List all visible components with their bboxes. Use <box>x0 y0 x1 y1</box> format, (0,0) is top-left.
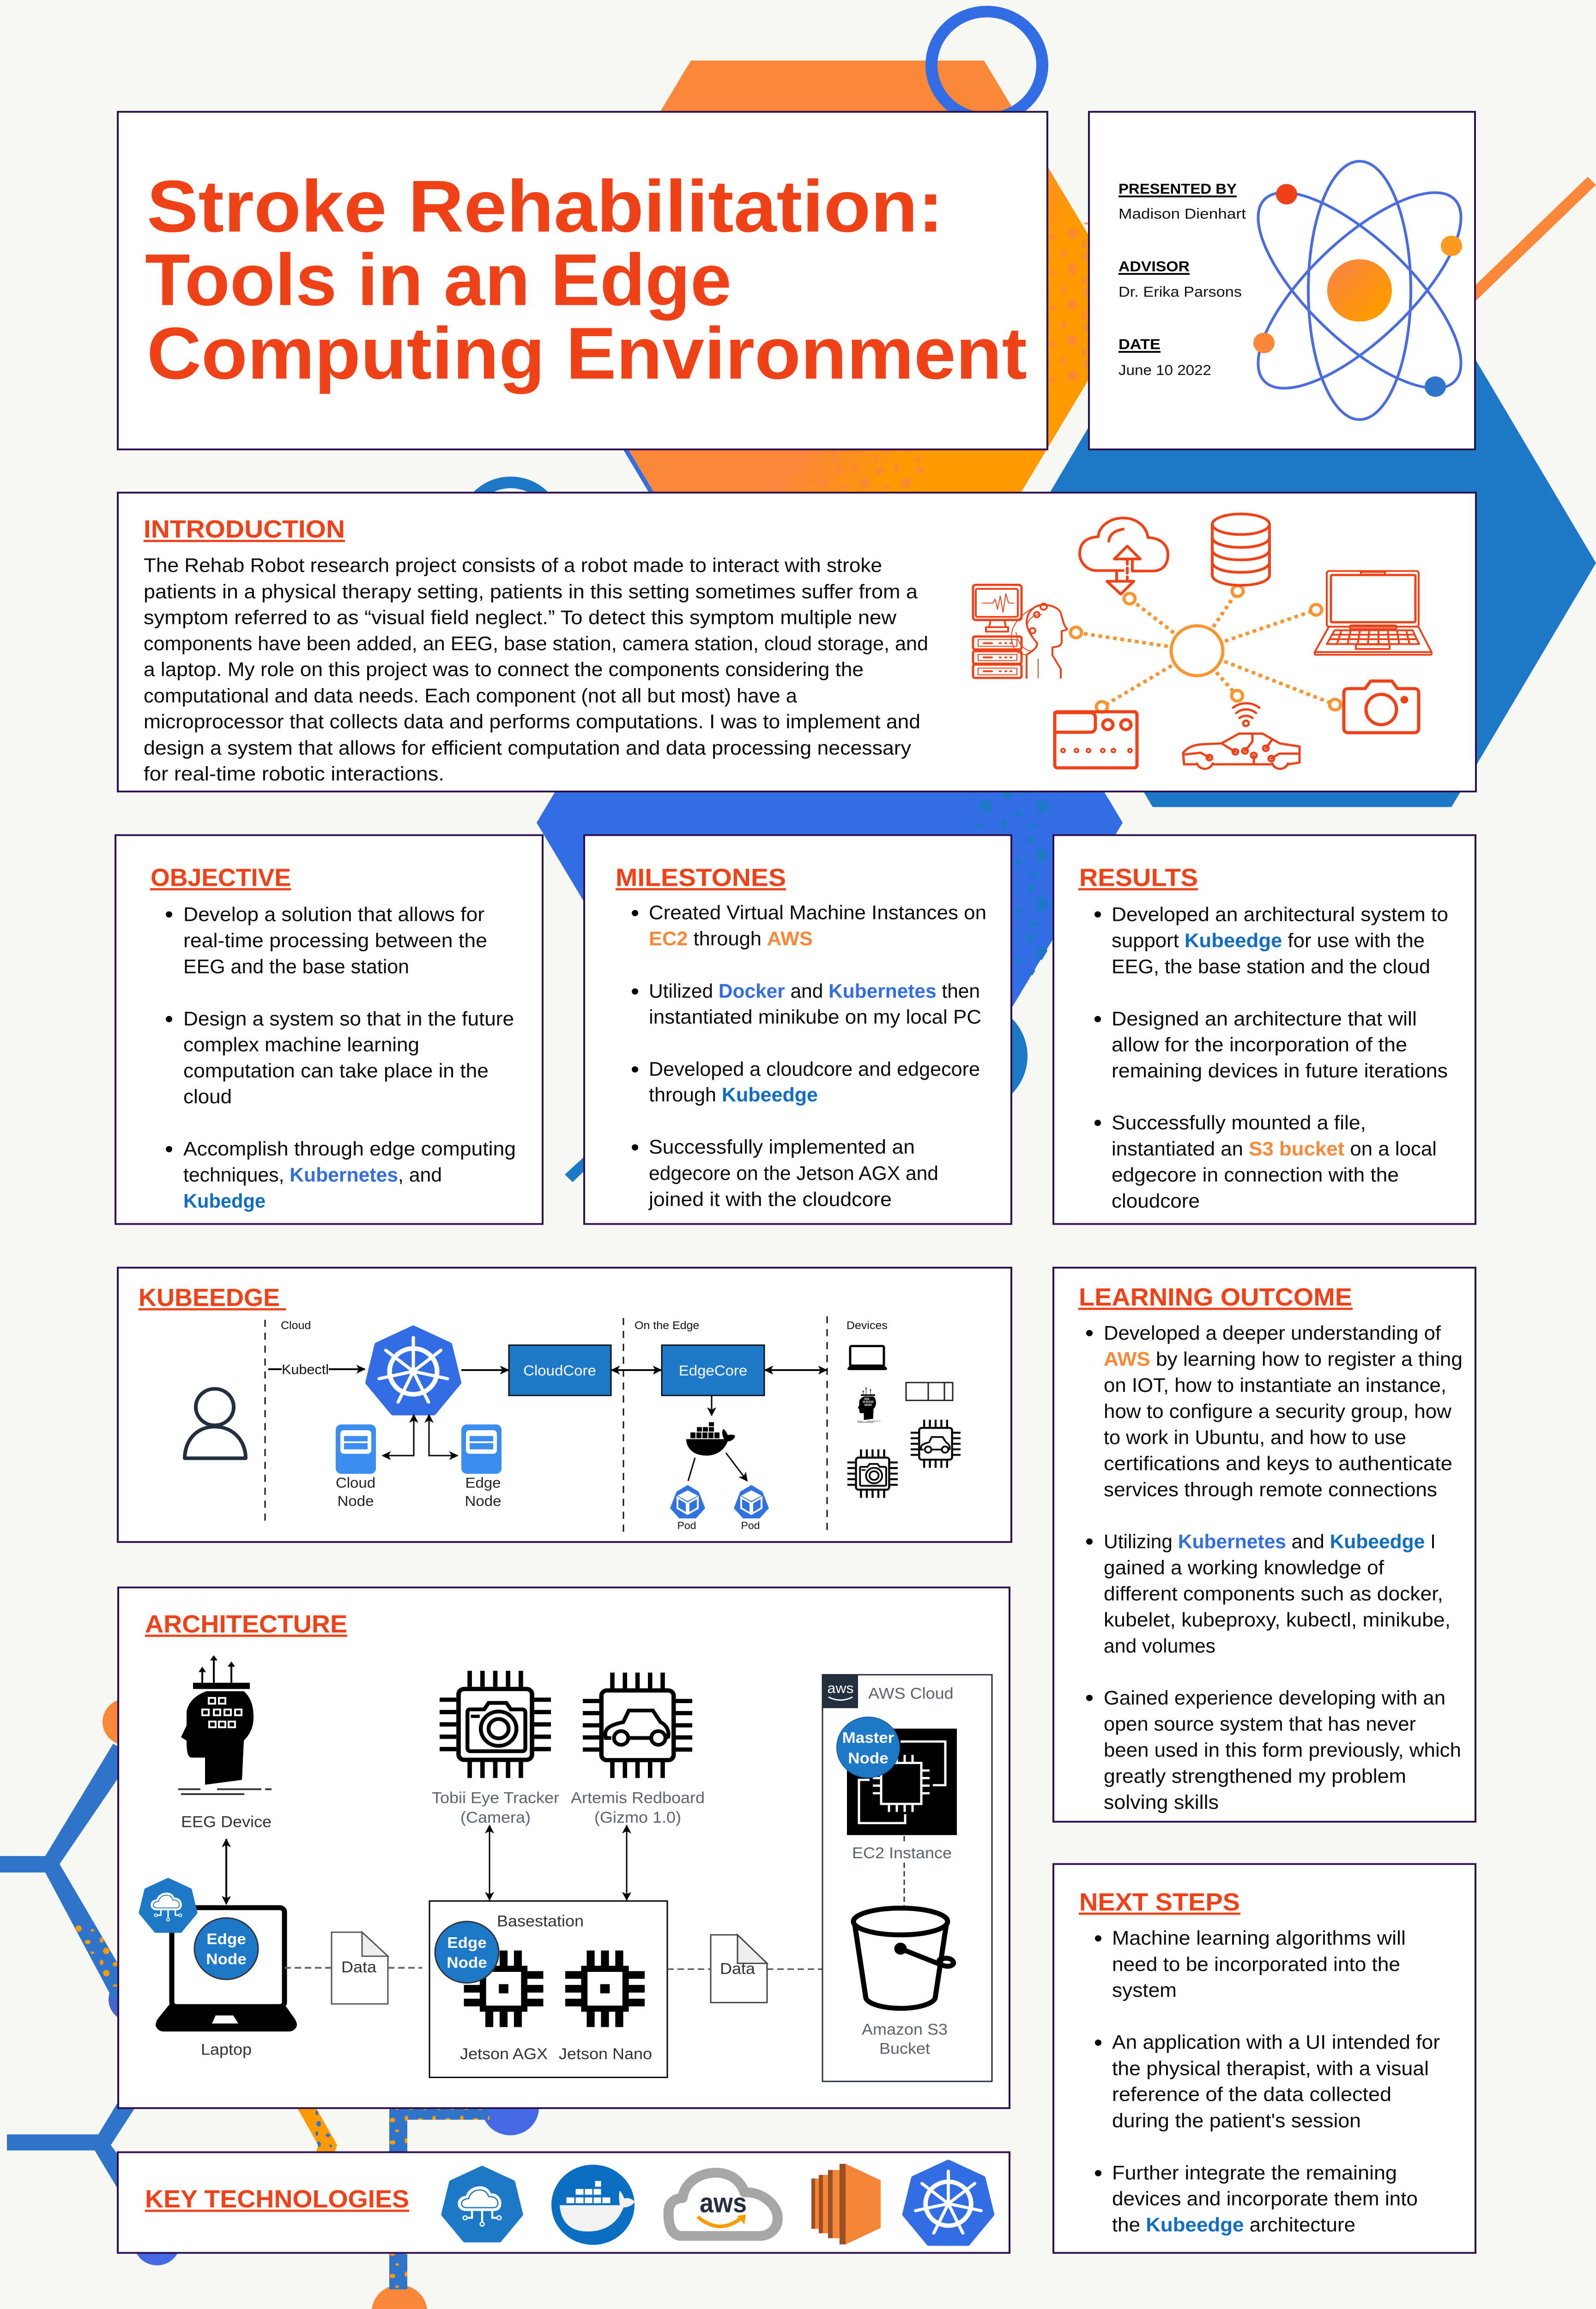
badge: laptop edge node <box>194 1918 258 1979</box>
icon: jetson nano <box>559 1951 652 2063</box>
icon: artemis redboard: (Gizmo 1.0) <box>594 1808 681 1826</box>
bullet list: learning outcome: AWS by learning how to register a thing <box>1104 1348 1463 1370</box>
icon: edge node: Node <box>465 1493 501 1509</box>
bullet list: learning outcome: gained a working knowledge of <box>1104 1557 1384 1579</box>
label: s3 bucket <box>862 2020 948 2057</box>
arrow: cloudcore to edgecore <box>611 1369 661 1371</box>
advisor: ADVISOR <box>1118 258 1190 274</box>
bullet list: results: EEG, the base station and the cloud <box>1112 956 1430 978</box>
panel: next steps <box>1053 1864 1475 2253</box>
icon: aws cloud: aws <box>700 2188 747 2218</box>
icon: jetson nano: Jetson Nano <box>559 2045 652 2063</box>
icon: connected car <box>1183 703 1300 769</box>
bullet list: learning outcome: greatly strengthened my problem <box>1104 1765 1406 1787</box>
text: introduction body: The Rehab Robot research project consists of a robot made to interact with stroke <box>144 555 882 576</box>
icon: pod 1: Pod <box>677 1520 696 1531</box>
box: basestation <box>429 1901 667 2077</box>
bullet list: learning outcome: and volumes <box>1104 1635 1215 1657</box>
aws badge <box>822 1675 858 1708</box>
label: s3 bucket: Bucket <box>879 2040 930 2057</box>
badge: laptop edge node: Edge <box>206 1931 246 1948</box>
icon: control module <box>1055 712 1137 768</box>
bullet list: next steps <box>1095 1928 1440 2236</box>
badge: master node: Master <box>842 1729 894 1747</box>
icon: cloud node: Node <box>338 1493 374 1509</box>
heading: architecture: ARCHITECTURE <box>145 1610 347 1638</box>
bullet list: objective: Design a system so that in the future <box>183 1008 514 1030</box>
icon: artemis redboard <box>571 1673 705 1826</box>
bullet list: next steps: Further integrate the remaining <box>1112 2162 1397 2184</box>
bullet list: milestones: through Kubeedge <box>649 1084 818 1106</box>
icon: data file 2 <box>711 1935 767 2002</box>
badge: laptop edge node: Node <box>206 1951 247 1968</box>
bullet list: learning outcome: Developed a deeper understanding of <box>1104 1323 1441 1344</box>
bullet list: objective: EEG and the base station <box>183 956 409 978</box>
presented by <box>1118 181 1246 222</box>
text: introduction body: for real-time robotic interactions. <box>144 763 444 785</box>
bullet list: learning outcome: been used in this form previously, which <box>1104 1740 1461 1761</box>
icon: ec2 instance: EC2 Instance <box>852 1844 952 1862</box>
bullet list: learning outcome: services through remote connections <box>1104 1479 1437 1501</box>
badge: basestation edge node: Node <box>447 1954 487 1971</box>
icon: kubernetes <box>369 1329 458 1412</box>
arrow: artemis to basestation <box>626 1825 627 1900</box>
bullet list: results: Developed an architectural system to <box>1112 904 1448 925</box>
text: introduction body <box>144 555 928 785</box>
text: introduction body: computational and data needs. Each component (not all but most) have a <box>144 685 798 707</box>
bullet list: results <box>1094 904 1448 1212</box>
bullet list: milestones: instantiated minikube on my local PC <box>649 1006 981 1028</box>
bullet list: results: Successfully mounted a file, <box>1112 1112 1366 1134</box>
bullet list: milestones <box>632 902 986 1210</box>
zone dividers and labels <box>265 1316 888 1535</box>
bullet list: learning outcome: open source system that has never <box>1104 1713 1416 1735</box>
bullet list: results: remaining devices in future iterations <box>1112 1060 1448 1082</box>
icon: aws cloud <box>669 2173 778 2236</box>
arrows: kubernetes to nodes <box>382 1414 458 1456</box>
bullet list: objective: computation can take place in the <box>183 1060 489 1082</box>
icon: artemis redboard: Artemis Redboard <box>571 1789 705 1807</box>
text: introduction body: components have been added, an EEG, base station, camera station, cloud storage, and <box>144 633 928 655</box>
box: basestation: Basestation <box>497 1912 584 1930</box>
presented by: PRESENTED BY <box>1118 181 1237 197</box>
bullet list: milestones: Developed a cloudcore and edgecore <box>649 1058 980 1080</box>
text: introduction body: a laptop. My role on this project was to connect the components considering the <box>144 659 864 681</box>
bullet list: objective: Accomplish through edge computing <box>183 1138 516 1160</box>
bullet list: learning outcome: how to configure a security group, how <box>1104 1401 1452 1422</box>
bullet list: objective: techniques, Kubernetes, and <box>183 1164 442 1186</box>
icon: cloud node: Cloud <box>336 1475 375 1491</box>
arrow: edgecore to devices <box>765 1369 827 1371</box>
bullet list: learning outcome: to work in Ubuntu, and how to use <box>1104 1427 1406 1449</box>
icon: jetson agx: Jetson AGX <box>460 2045 548 2063</box>
badge: master node <box>837 1717 900 1777</box>
heading: key technologies: KEY TECHNOLOGIES <box>145 2185 409 2213</box>
arrow: kubernetes to cloudcore <box>461 1369 508 1371</box>
heading: title: Computing Environment <box>147 312 1027 394</box>
date: June 10 2022 <box>1118 362 1211 378</box>
heading: title: Tools in an Edge <box>145 239 732 321</box>
panel: introduction <box>118 493 1476 792</box>
icon: camera <box>1344 681 1419 733</box>
bullet list: milestones: Successfully implemented an <box>649 1136 915 1158</box>
panel: key technologies <box>118 2152 1010 2253</box>
date: DATE <box>1118 336 1161 352</box>
text: introduction body: microprocessor that collects data and performs computations. I was to implement and <box>144 711 920 733</box>
heading: title <box>145 165 1027 394</box>
icon: device camera chip <box>847 1450 898 1498</box>
icon: edge node: Edge <box>465 1475 501 1491</box>
bullet list: next steps: need to be incorporated into the <box>1112 1954 1400 1976</box>
icon: cloud node <box>336 1424 376 1509</box>
icon: user <box>185 1389 246 1458</box>
panel: architecture <box>118 1588 1010 2108</box>
bullet list: next steps: reference of the data collected <box>1112 2084 1391 2105</box>
icon: laptop <box>1315 571 1432 655</box>
badge: basestation edge node <box>435 1922 499 1983</box>
connector: ec2 to s3 <box>903 1836 905 1906</box>
bullet list: results: edgecore in connection with the <box>1112 1164 1399 1186</box>
bullet list: results: cloudcore <box>1112 1190 1200 1212</box>
icon: kubeedge badge <box>141 1880 195 1931</box>
text: introduction body: design a system that allows for efficient computation and data processing necessary <box>144 737 911 759</box>
bullet list: learning outcome: solving skills <box>1104 1792 1219 1813</box>
bullet list: next steps: the physical therapist, with a visual <box>1112 2058 1429 2079</box>
icon: pod 2: Pod <box>741 1520 760 1531</box>
bullet list: objective: complex machine learning <box>183 1034 419 1056</box>
connectors <box>1070 586 1341 712</box>
zone dividers and labels: Cloud <box>281 1319 311 1332</box>
presented by: Madison Dienhart <box>1118 206 1246 222</box>
icon: pod 1 <box>670 1485 705 1531</box>
background shapes: hexagons <box>537 60 1596 1067</box>
box: cloudcore: CloudCore <box>523 1362 596 1378</box>
box: aws cloud <box>822 1675 992 2081</box>
heading: milestones: MILESTONES <box>616 863 786 891</box>
box: aws cloud: AWS Cloud <box>868 1685 954 1702</box>
arrows: docker to pods <box>688 1453 747 1481</box>
bullet list: next steps: system <box>1112 1980 1177 2001</box>
heading: results: RESULTS <box>1079 863 1198 891</box>
bullet list: results: instantiated an S3 bucket on a local <box>1112 1138 1437 1160</box>
box: cloudcore <box>509 1345 611 1396</box>
bullet list: next steps: the Kubeedge architecture <box>1112 2214 1355 2236</box>
icon: kubeedge <box>444 2169 520 2240</box>
icon: aws brick <box>811 2164 881 2244</box>
label: s3 bucket: Amazon S3 <box>862 2020 948 2038</box>
panel: kubeedge <box>118 1268 1011 1542</box>
icon: tobii eye tracker: (Camera) <box>460 1808 531 1826</box>
icon: device laptop <box>847 1346 887 1370</box>
arrow: edgecore to docker <box>711 1396 712 1415</box>
bullet list: next steps: devices and incorporate them into <box>1112 2188 1418 2210</box>
aws badge: aws <box>828 1680 853 1696</box>
zone dividers and labels: Devices <box>846 1319 888 1332</box>
bullet list: milestones: Utilized Docker and Kubernetes then <box>649 980 980 1002</box>
connector: laptop to data <box>284 1967 422 1969</box>
icon: EEG station and head <box>973 585 1067 678</box>
icon: EEG device <box>178 1655 272 1831</box>
box: edgecore <box>662 1345 764 1396</box>
arrow: EEG to laptop <box>225 1839 227 1904</box>
bullet list: objective: cloud <box>183 1086 232 1108</box>
bullet list: milestones: Created Virtual Machine Instances on <box>649 902 986 924</box>
text: introduction body: patients in a physical therapy setting, patients in this setting sometimes suffer from a <box>144 581 918 603</box>
badge: master node: Node <box>848 1750 889 1767</box>
bullet list: learning outcome: kubelet, kubeproxy, kubectl, minikube, <box>1104 1609 1451 1631</box>
panel: milestones <box>584 835 1011 1224</box>
icon: jetson agx <box>460 1951 548 2063</box>
connector: basestation to data to cloud <box>667 1969 822 1970</box>
icon: docker <box>686 1422 735 1456</box>
bullet list: milestones: EC2 through AWS <box>649 928 813 950</box>
bullet list: learning outcome <box>1086 1323 1463 1813</box>
icon: data file 1 <box>332 1932 388 2004</box>
text: introduction body: symptom referred to as “visual field neglect.” To detect this symptom multiple new <box>144 607 897 629</box>
bullet list: learning outcome: different components such as docker, <box>1104 1583 1443 1605</box>
heading: objective: OBJECTIVE <box>151 863 291 891</box>
icon: device EEG head <box>857 1387 881 1422</box>
panel: title <box>118 112 1047 449</box>
bullet list: learning outcome: Utilizing Kubernetes and Kubeedge I <box>1104 1531 1436 1553</box>
icon: device car chip <box>911 1420 961 1468</box>
heading: kubeedge: KUBEEDGE <box>139 1283 280 1312</box>
advisor: Dr. Erika Parsons <box>1118 284 1242 300</box>
panel: objective <box>115 835 543 1224</box>
icon: device rectangle <box>906 1383 953 1400</box>
icon: edge node <box>461 1424 502 1509</box>
bullet list: milestones: edgecore on the Jetson AGX and <box>649 1163 938 1185</box>
bullet list: learning outcome: certifications and keys to authenticate <box>1104 1453 1452 1475</box>
bullet list: objective: Develop a solution that allows for <box>183 904 484 925</box>
bullet list: milestones: joined it with the cloudcore <box>648 1189 892 1210</box>
advisor <box>1118 258 1242 300</box>
bullet list: learning outcome: Gained experience developing with an <box>1104 1687 1445 1709</box>
icon: cloud <box>1080 518 1168 594</box>
icon: laptop: Laptop <box>201 2041 252 2058</box>
arrow: tobii to basestation <box>489 1825 490 1900</box>
icon: ec2 instance <box>847 1729 957 1862</box>
icon: database <box>1212 514 1270 585</box>
icon: pod 2 <box>734 1485 769 1531</box>
icon: kubernetes <box>906 2163 991 2243</box>
icon: data file 1: Data <box>341 1958 376 1976</box>
heading: title: Stroke Rehabilitation: <box>147 165 943 248</box>
bullet list: results: support Kubeedge for use with the <box>1112 930 1425 952</box>
heading: learning outcome: LEARNING OUTCOME <box>1079 1283 1352 1311</box>
badge: basestation edge node: Edge <box>447 1934 487 1952</box>
icon: laptop <box>156 1908 297 2058</box>
icon: atom <box>1228 161 1491 420</box>
bullet list: results: Designed an architecture that will <box>1112 1008 1417 1030</box>
box: edgecore: EdgeCore <box>679 1362 747 1378</box>
bullet list: next steps: Machine learning algorithms will <box>1112 1928 1406 1949</box>
zone dividers and labels: On the Edge <box>635 1319 699 1332</box>
panel: presenter info <box>1089 112 1491 449</box>
icon: docker <box>551 2165 635 2245</box>
bullet list: objective: Kubedge <box>183 1190 266 1212</box>
panel: results <box>1053 835 1475 1224</box>
bullet list: results: allow for the incorporation of the <box>1112 1034 1407 1056</box>
panel: learning outcome <box>1053 1268 1475 1822</box>
icon: tobii eye tracker <box>432 1671 559 1826</box>
icon: s3 bucket <box>853 1908 954 2008</box>
heading: next steps: NEXT STEPS <box>1079 1888 1240 1916</box>
diagram: connected devices <box>973 514 1432 769</box>
bullet list: learning outcome: on IOT, how to instantiate an instance, <box>1104 1375 1446 1396</box>
bullet list: objective <box>166 904 516 1212</box>
icon: tobii eye tracker: Tobii Eye Tracker <box>432 1789 559 1807</box>
icon: EEG device: EEG Device <box>181 1813 272 1831</box>
bullet list: next steps: during the patient's session <box>1112 2110 1361 2132</box>
bullet list: next steps: An application with a UI intended for <box>1112 2031 1440 2054</box>
kubectl arrow: Kubectl <box>282 1362 329 1377</box>
date <box>1118 336 1211 378</box>
heading: introduction: INTRODUCTION <box>144 515 345 543</box>
bullet list: objective: real-time processing between the <box>183 930 487 952</box>
icon: data file 2: Data <box>720 1960 755 1978</box>
